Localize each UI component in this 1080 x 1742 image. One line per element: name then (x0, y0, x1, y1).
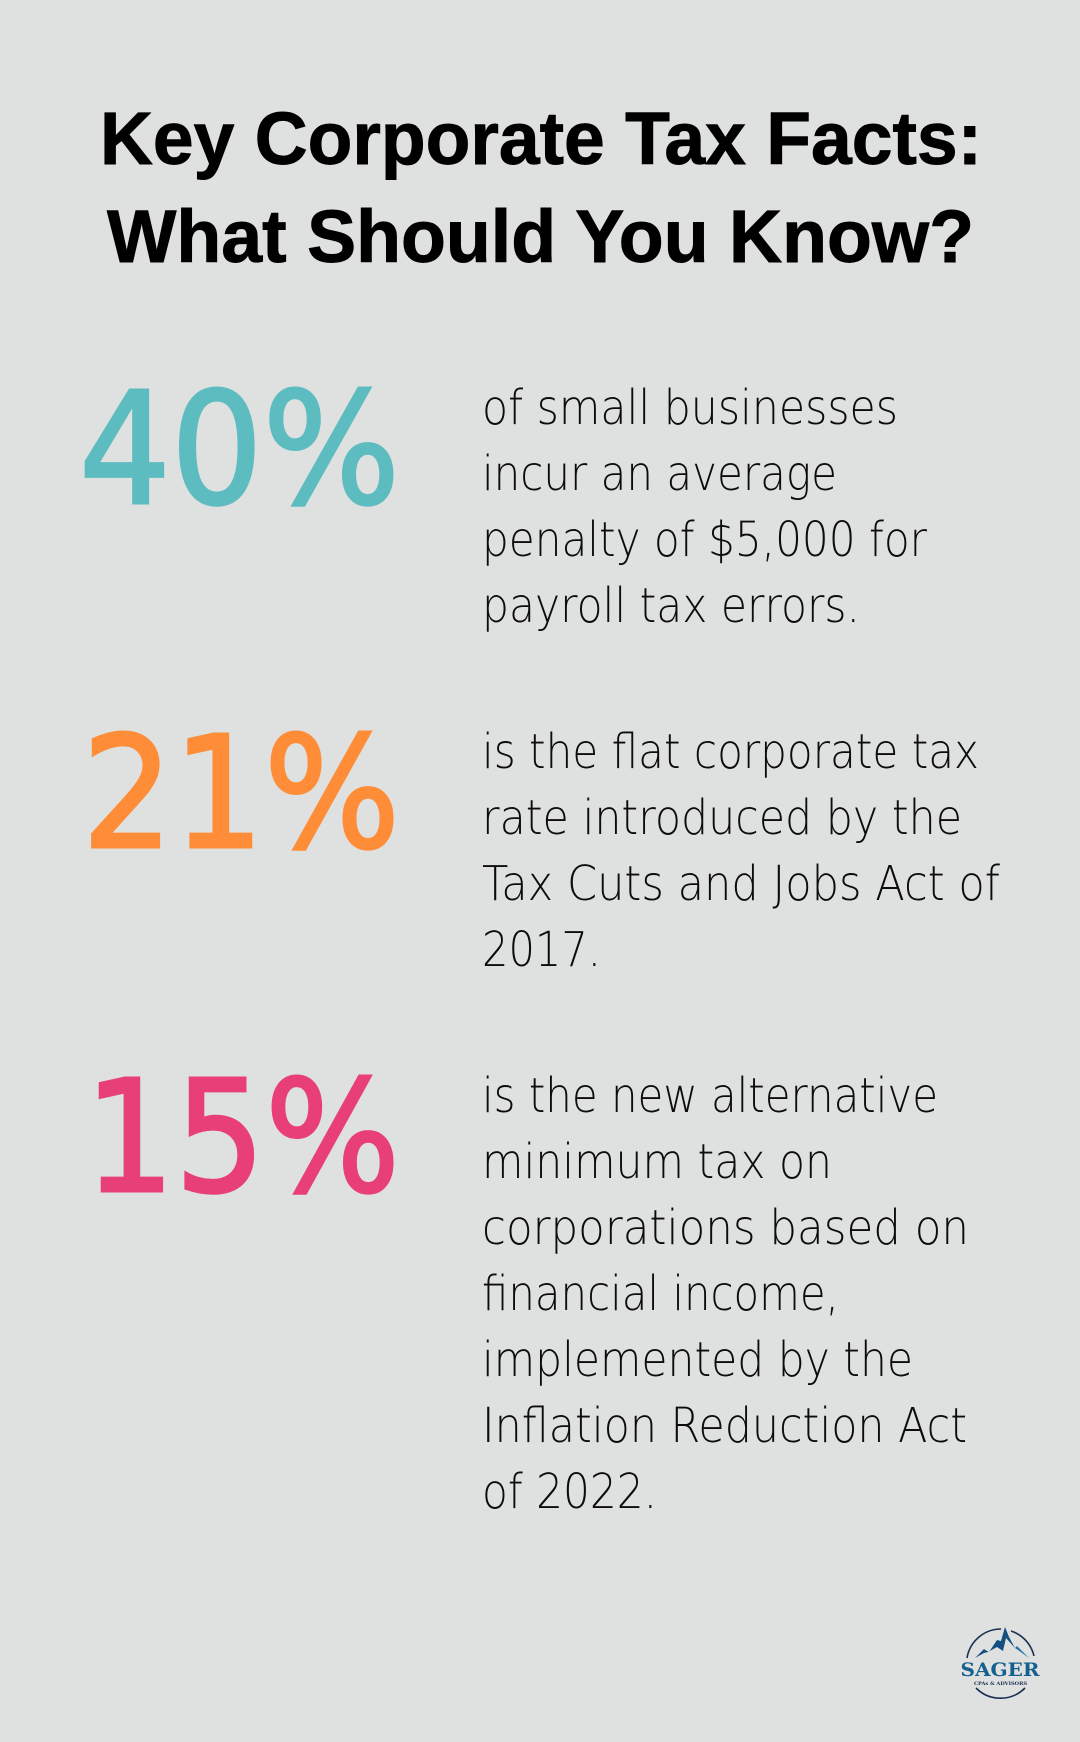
text: 15% description: corporations based on (482, 1200, 969, 1256)
text: 21% description: 2017. (482, 922, 601, 978)
text: 21% description: Tax Cuts and Jobs Act of (482, 856, 1000, 912)
title: Key Corporate Tax Facts: (100, 97, 982, 180)
text: 40% description: of small businesses (482, 380, 898, 436)
text: 40% description: incur an average (482, 446, 837, 502)
statistic: 21%: 21% (82, 703, 400, 884)
panel: 15% fact (84, 1047, 969, 1520)
text: 40% description: payroll tax errors. (482, 578, 860, 634)
text: 15% description: Inflation Reduction Act (482, 1398, 967, 1454)
text: 15% description: financial income, (482, 1266, 839, 1322)
text: 40% description: penalty of $5,000 for (482, 512, 927, 568)
text: 21% description: is the flat corporate tax (482, 724, 979, 780)
icon: circle arcs (967, 1629, 1034, 1698)
logo tagline: CPAs & ADVISORS (974, 1681, 1027, 1687)
panel: 40% fact (79, 359, 927, 634)
logo wordmark: SAGER (960, 1659, 1040, 1681)
title (100, 97, 982, 278)
text: 15% description: implemented by the (482, 1332, 913, 1388)
text: 21% description: rate introduced by the (482, 790, 962, 846)
text: 21% description (482, 724, 1000, 978)
statistic: 40%: 40% (79, 359, 400, 540)
text: 15% description: of 2022. (482, 1464, 657, 1520)
text: 15% description: is the new alternative (482, 1068, 938, 1124)
logo: Sager CPAs & Advisors (960, 1627, 1040, 1698)
statistic: 15%: 15% (84, 1047, 400, 1228)
text: 15% description (482, 1068, 969, 1520)
panel: 21% fact (82, 703, 1000, 978)
text: 15% description: minimum tax on (482, 1134, 832, 1190)
icon: mountain (975, 1627, 1029, 1658)
text: 40% description (482, 380, 927, 634)
title: What Should You Know? (107, 195, 974, 278)
